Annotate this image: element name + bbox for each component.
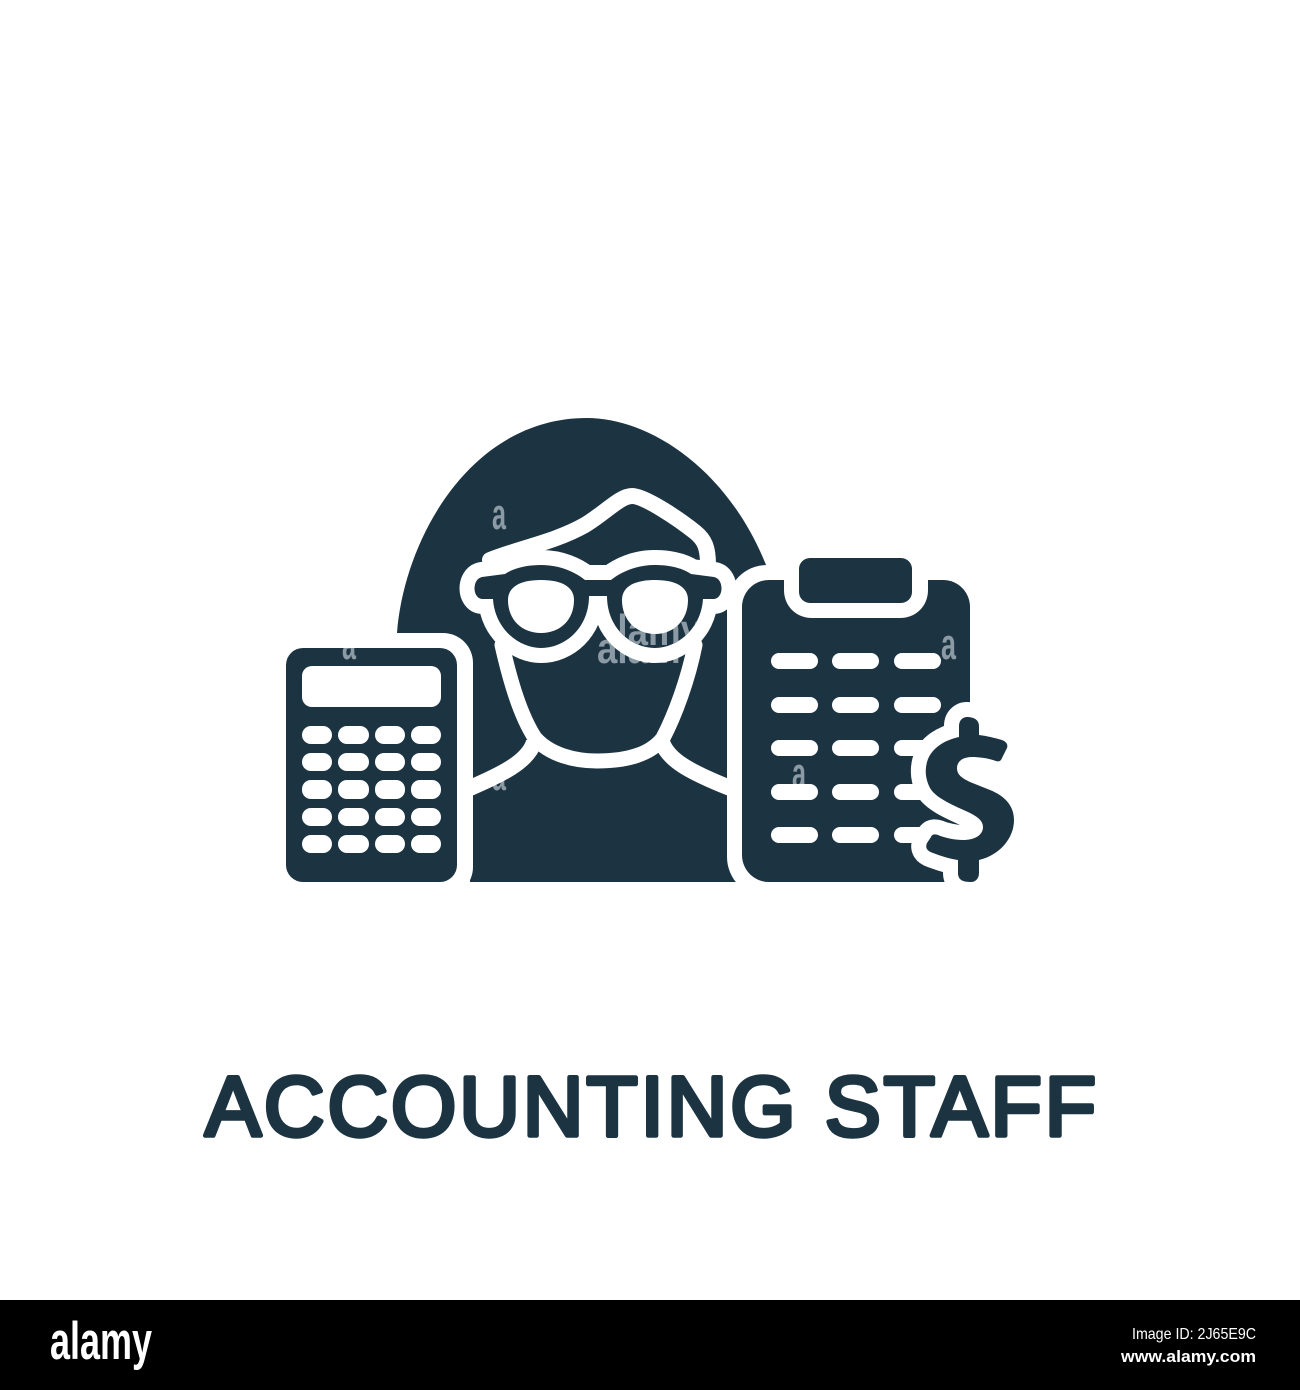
alamy logo: alamy — [50, 1312, 152, 1371]
glasses — [474, 565, 722, 655]
clipboard watermarks: a — [941, 620, 956, 669]
clipboard table lines — [771, 653, 941, 843]
icon base mask — [260, 882, 1040, 912]
left shoulder line — [470, 742, 534, 788]
calculator screen — [302, 666, 441, 707]
calculator — [286, 633, 473, 882]
website: www.alamy.com — [1120, 1347, 1256, 1366]
watermarks on silhouette: alamy — [597, 624, 701, 673]
clipboard watermarks: a — [792, 749, 806, 798]
watermarks on silhouette — [492, 490, 701, 800]
watermarks on silhouette: a — [492, 751, 506, 800]
clipboard board — [742, 580, 970, 882]
title: ACCOUNTING STAFF — [205, 1060, 1096, 1154]
dollar halo — [926, 717, 1014, 882]
left lens — [508, 580, 574, 633]
calculator watermark: a — [342, 620, 356, 669]
infographic canvas — [0, 418, 1300, 1390]
calculator halo — [271, 633, 473, 897]
clipboard halo — [727, 565, 985, 897]
right lens — [622, 580, 688, 634]
clip halo — [784, 575, 928, 618]
glasses frame — [474, 565, 722, 648]
calculator buttons — [302, 726, 441, 853]
glasses halo — [474, 565, 722, 648]
image id: Image ID: 2J65E9C — [1132, 1326, 1256, 1343]
calculator body — [286, 648, 457, 882]
dollar shape — [926, 717, 1014, 882]
clipboard — [727, 558, 985, 897]
icon: dollar sign — [926, 717, 1014, 882]
woman silhouette: hair and body — [397, 418, 768, 882]
watermarks on silhouette: a — [492, 490, 506, 539]
footer band — [0, 1300, 1300, 1390]
clip — [799, 558, 912, 603]
clipboard watermarks — [792, 620, 956, 798]
footer background — [0, 1300, 1300, 1390]
face outline — [502, 645, 695, 761]
icon: accounting staff — [286, 418, 1014, 882]
right shoulder line — [662, 742, 730, 788]
watermark on glasses: alamy — [597, 606, 701, 655]
hairline — [490, 496, 708, 565]
